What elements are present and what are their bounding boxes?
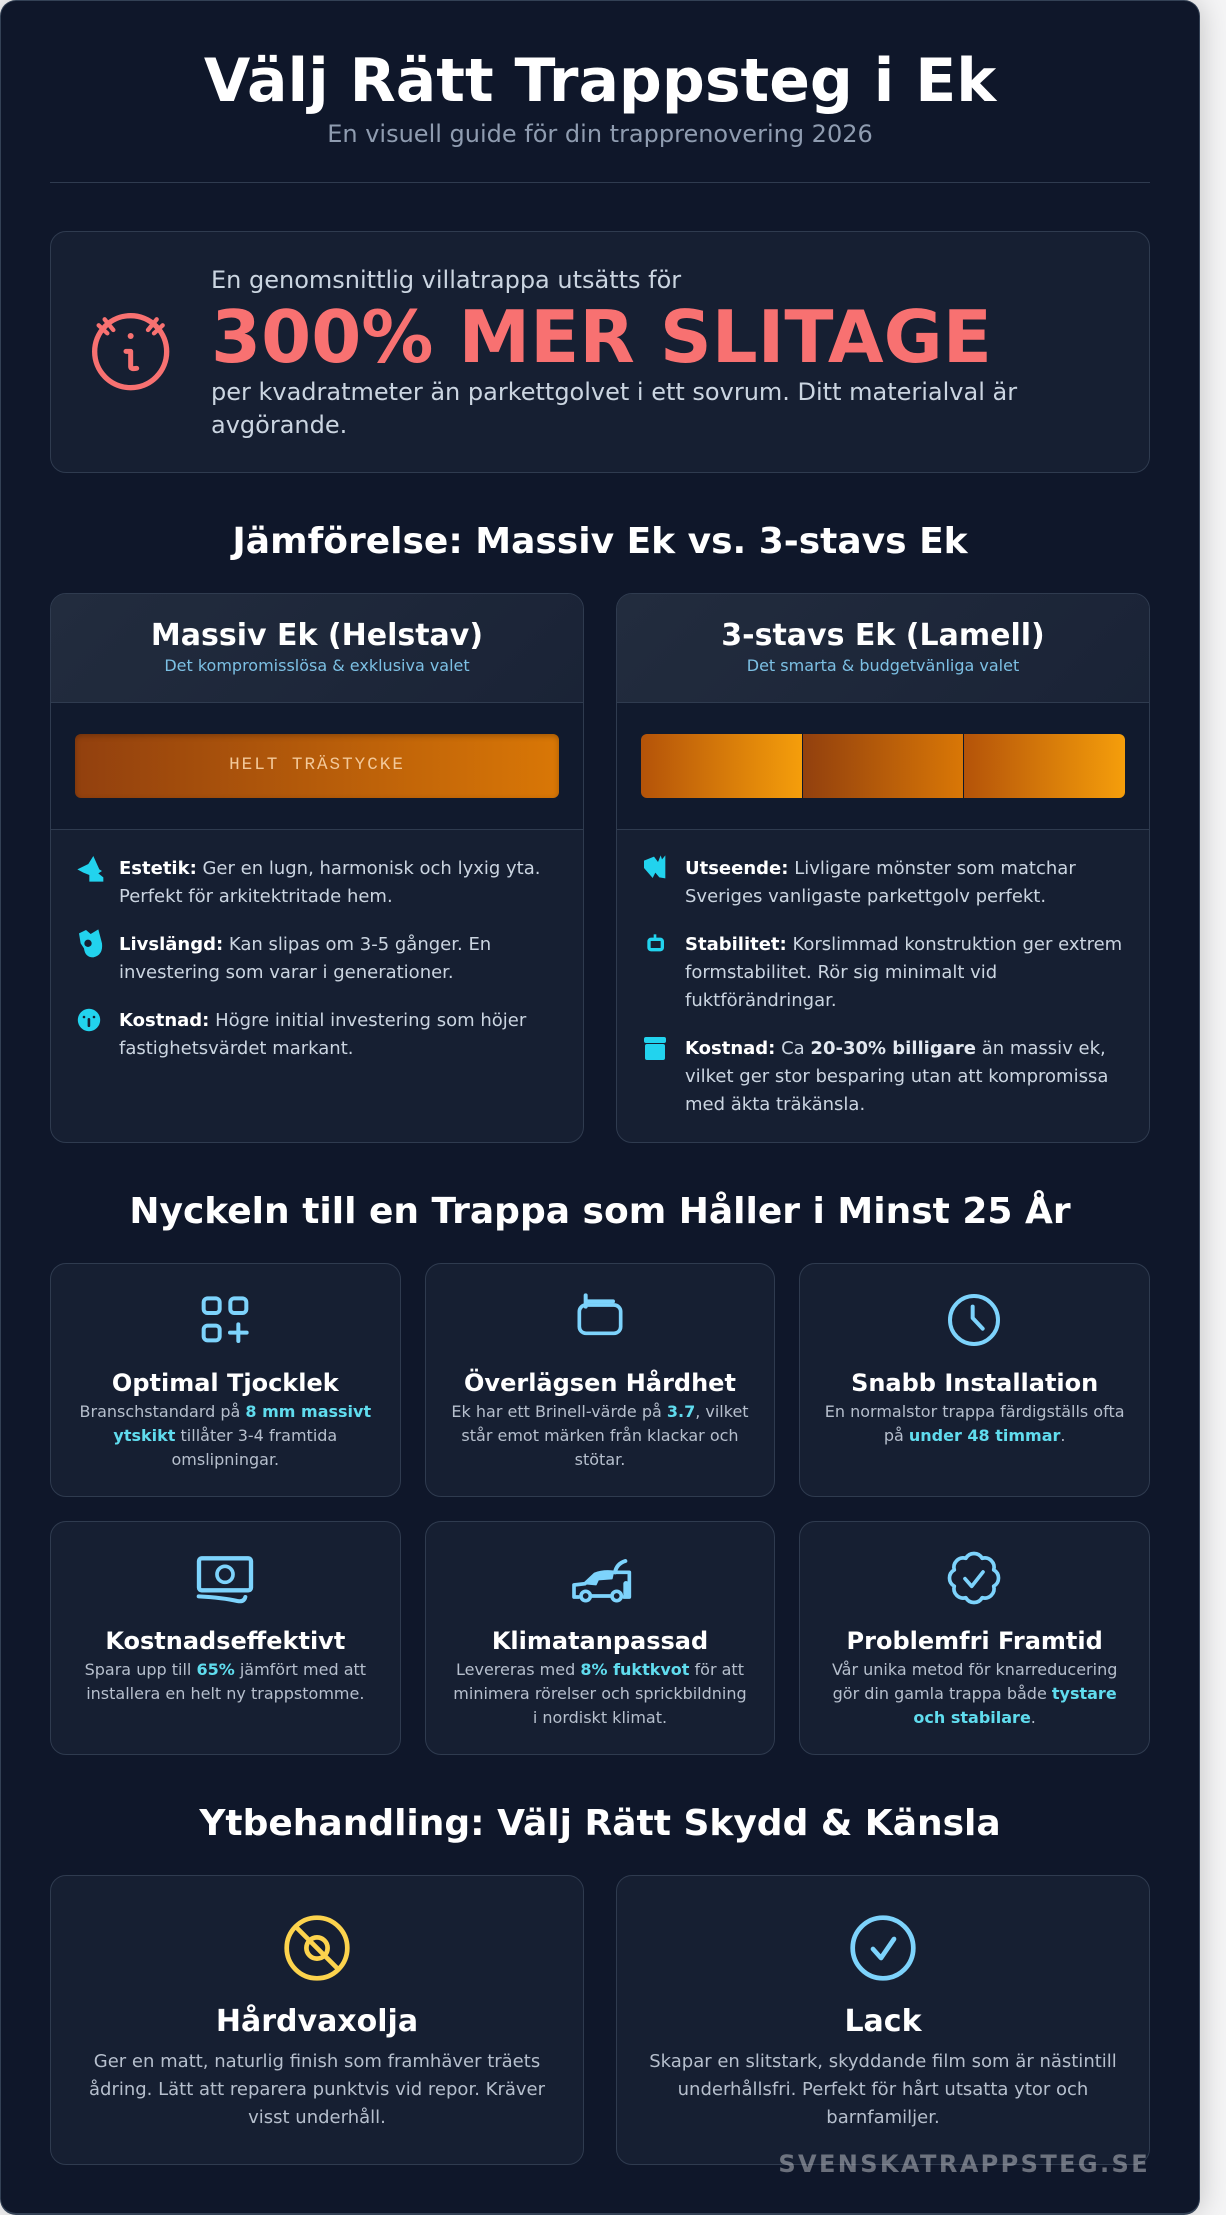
hero statistic: 300% more wear: 300% MER SLITAGE <box>211 295 992 379</box>
card text: Ek har ett Brinell-värde på 3.7, vilket <box>451 1402 749 1421</box>
icon: banknote <box>196 1556 254 1604</box>
card text: Ger en matt, naturlig finish som framhäver träets <box>94 2051 540 2072</box>
icon: cost box <box>644 1037 666 1060</box>
list item: kostnad <box>685 1038 1108 1115</box>
card text: Skapar en slitstark, skyddande film som är nästintill <box>649 2051 1117 2072</box>
wood section: three staves <box>617 703 1149 830</box>
list item: estetik: Perfekt för arkitektritade hem. <box>119 886 393 907</box>
watermark: SVENSKATRAPPSTEG.SE <box>778 2150 1150 2178</box>
title: Välj Rätt Trappsteg i Ek <box>204 46 996 116</box>
card title: Klimatanpassad <box>492 1627 708 1655</box>
list item: utseende <box>685 858 1076 907</box>
feature list: massiv ek <box>78 856 540 1059</box>
card: optimal tjocklek <box>50 1263 401 1497</box>
card text: stötar. <box>575 1450 625 1469</box>
three stave bar <box>641 734 1125 798</box>
card text: gör din gamla trappa både tystare <box>833 1684 1117 1703</box>
icon: check badge <box>948 1552 1000 1604</box>
heading: key factors: Nyckeln till en Trappa som Håller i Minst 25 År <box>129 1191 1071 1232</box>
list item: estetik: Estetik: Ger en lugn, harmonisk och lyxig yta. <box>119 858 540 879</box>
card text <box>453 1660 747 1727</box>
card text: i nordiskt klimat. <box>533 1708 667 1727</box>
card text: omslipningar. <box>172 1450 279 1469</box>
card: kostnadseffektivt <box>50 1521 401 1755</box>
panel title: Massiv Ek (Helstav) <box>151 618 483 653</box>
card text <box>649 2051 1117 2128</box>
card text: minimera rörelser och sprickbildning <box>453 1684 747 1703</box>
card text <box>80 1402 371 1469</box>
panel: massiv ek <box>50 593 584 1143</box>
list item: kostnad: med äkta träkänsla. <box>685 1094 865 1115</box>
card text: ådring. Lätt att reparera punktvis vid repor. Kräver <box>89 2079 545 2100</box>
stave 3 <box>964 734 1125 798</box>
card text: på under 48 timmar. <box>884 1426 1066 1445</box>
icon: check circle <box>850 1915 916 1981</box>
solid plank bar: HELT TRÄSTYCKE <box>229 755 405 775</box>
icon: warning clock <box>92 313 170 390</box>
panel: 3-stavs ek <box>616 593 1150 1143</box>
panel header: massiv ek <box>51 594 583 703</box>
card text: Levereras med 8% fuktkvot för att <box>456 1660 744 1679</box>
card text: och stabilare. <box>913 1708 1036 1727</box>
card text: Branschstandard på 8 mm massivt <box>80 1402 371 1421</box>
heading: surface treatment: Ytbehandling: Välj Rätt Skydd & Känsla <box>199 1803 1001 1844</box>
icon: aesthetics <box>78 856 104 882</box>
icon: hardness block <box>578 1293 622 1336</box>
stave 2 <box>803 734 964 798</box>
panel title: 3-stavs Ek (Lamell) <box>721 618 1045 653</box>
list item: stabilitet: fuktförändringar. <box>685 990 837 1011</box>
list item: estetik <box>119 858 540 907</box>
icon: lifespan <box>79 929 102 958</box>
card text: ytskikt tillåter 3-4 framtida <box>113 1426 337 1445</box>
panel header: 3-stavs ek <box>617 594 1149 703</box>
card text <box>85 1660 366 1703</box>
list item: livslängd: investering som varar i generationer. <box>119 962 454 983</box>
card text: installera en helt ny trappstomme. <box>86 1684 364 1703</box>
icon: grid plus <box>202 1296 249 1343</box>
card title: Problemfri Framtid <box>847 1627 1103 1655</box>
card text <box>451 1402 749 1469</box>
card text: Spara upp till 65% jämfört med att <box>85 1660 366 1679</box>
list item: kostnad: fastighetsvärdet markant. <box>119 1038 353 1059</box>
card title: Kostnadseffektivt <box>105 1627 345 1655</box>
hero explanatory text: per kvadratmeter än parkettgolvet i ett sovrum. Ditt materialval är <box>211 378 1017 406</box>
card text <box>832 1660 1117 1727</box>
list item: livslängd: Livslängd: Kan slipas om 3-5 gånger. En <box>119 934 491 955</box>
list item: livslängd <box>119 934 491 983</box>
card: snabb installation <box>799 1263 1150 1497</box>
card text: barnfamiljer. <box>826 2107 940 2128</box>
list item: kostnad: vilket ger stor besparing utan att kompromissa <box>685 1066 1108 1087</box>
wood section: solid plank <box>51 703 583 830</box>
card: överlägsen hårdhet <box>425 1263 775 1497</box>
list item: utseende: Utseende: Livligare mönster som matchar <box>685 858 1076 879</box>
panel subtitle: Det smarta & budgetvänliga valet <box>747 656 1019 675</box>
list item: utseende: Sveriges vanligaste parkettgolv perfekt. <box>685 886 1046 907</box>
card text <box>825 1402 1125 1445</box>
card text: underhållsfri. Perfekt för hårt utsatta ytor och <box>678 2079 1088 2100</box>
heading: comparison: Jämförelse: Massiv Ek vs. 3-stavs Ek <box>232 521 968 562</box>
card title: Snabb Installation <box>851 1369 1098 1397</box>
card title: Lack <box>844 2004 922 2039</box>
panel: lack <box>616 1875 1150 2165</box>
hero explanatory text <box>211 378 1018 439</box>
list item: kostnad <box>119 1010 526 1059</box>
solid plank bar <box>75 734 559 798</box>
icon: appearance <box>644 856 666 878</box>
feature list: 3-stavs ek <box>644 856 1122 1115</box>
card text: visst underhåll. <box>248 2107 386 2128</box>
list item: kostnad: Kostnad: Ca 20-30% billigare än massiv ek, <box>685 1038 1106 1059</box>
hero explanatory text: avgörande. <box>211 411 347 439</box>
icon: stability <box>647 934 664 952</box>
card text: En normalstor trappa färdigställs ofta <box>825 1402 1125 1421</box>
list item: stabilitet <box>685 934 1122 1011</box>
card: klimatanpassad <box>425 1521 775 1755</box>
hero lead text: En genomsnittlig villatrappa utsätts för <box>211 266 681 294</box>
list item: stabilitet: Stabilitet: Korslimmad konstruktion ger extrem <box>685 934 1122 955</box>
card title: Hårdvaxolja <box>216 2004 418 2039</box>
subtitle: En visuell guide för din trapprenovering 2026 <box>327 120 873 148</box>
card title: Optimal Tjocklek <box>112 1369 339 1397</box>
card text <box>89 2051 545 2128</box>
panel: hårdvaxolja <box>50 1875 584 2165</box>
icon: cost <box>78 1008 100 1032</box>
card title: Överlägsen Hårdhet <box>464 1369 736 1397</box>
panel subtitle: Det kompromisslösa & exklusiva valet <box>164 656 470 675</box>
icon: clock <box>948 1294 1000 1346</box>
panel: hero statistic <box>50 231 1150 473</box>
stave 1 <box>641 734 803 798</box>
list item: kostnad: Kostnad: Högre initial investering som höjer <box>119 1010 526 1031</box>
icon: no-wax circle <box>284 1915 350 1981</box>
card text: Vår unika metod för knarreducering <box>832 1660 1117 1679</box>
list item: stabilitet: formstabilitet. Rör sig minimalt vid <box>685 962 997 983</box>
card: problemfri framtid <box>799 1521 1150 1755</box>
icon: truck <box>572 1559 632 1602</box>
card text: står emot märken från klackar och <box>461 1426 739 1445</box>
